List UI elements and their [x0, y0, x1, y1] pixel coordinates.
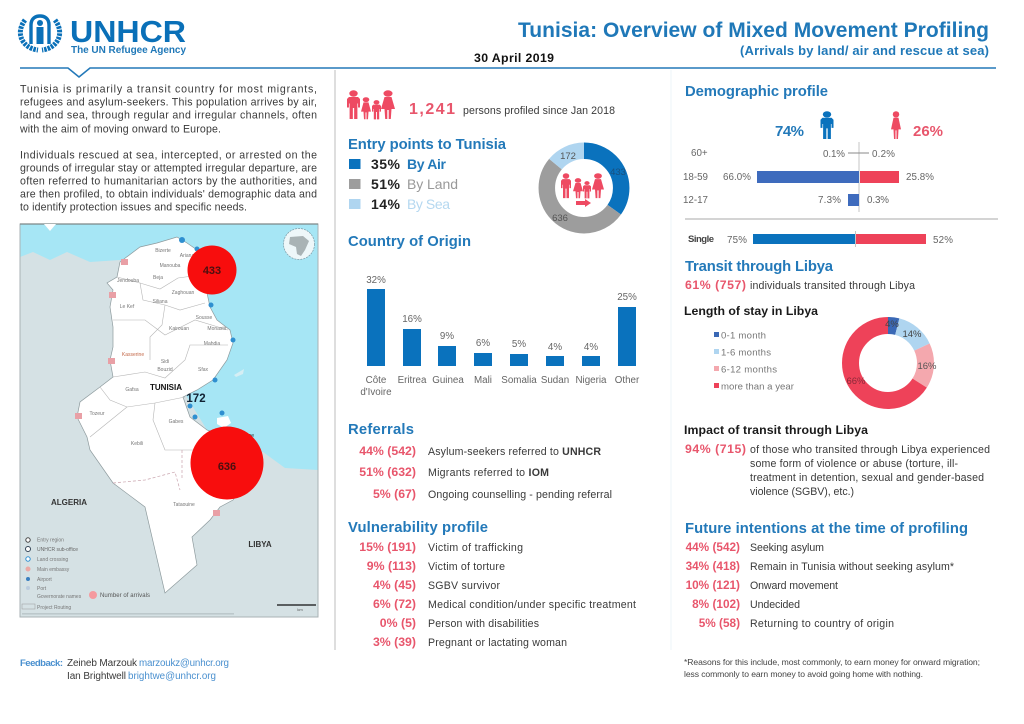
legend: Port: [37, 586, 47, 592]
donut chart: entry points: 636: [552, 213, 568, 224]
future intention rows: 10% (121): [686, 578, 740, 592]
bar chart: country of origin: 4%: [548, 342, 562, 353]
legend: entry points: 14%: [371, 196, 401, 212]
legend: Entry region: [37, 538, 64, 544]
text block: introduction: Individuals rescued at sea, intercepted, or arrested on the: [20, 150, 317, 162]
legend: entry points: By Sea: [407, 196, 450, 212]
bar chart: country of origin: Nigeria: [575, 375, 607, 386]
donut chart: length of stay: 66%: [846, 376, 866, 387]
legend: length of stay: 0-1 month: [721, 330, 766, 342]
map: Tunisia arrivals: LIBYA: [248, 540, 272, 549]
donut chart: length of stay: 4%: [885, 319, 899, 330]
vulnerability rows: Victim of trafficking: [428, 542, 523, 554]
impact description: violence (SGBV), etc.): [750, 486, 854, 498]
bar chart: country of origin: [360, 275, 640, 398]
population pyramid: [683, 142, 934, 212]
vulnerability rows: Medical condition/under specific treatment: [428, 599, 636, 611]
bar chart: country of origin: 25%: [617, 292, 637, 303]
vulnerability rows: 6% (72): [373, 597, 416, 611]
feedback contacts: marzoukz@unhcr.org: [139, 658, 229, 669]
icon: family: [347, 90, 395, 119]
place labels: Tataouine: [173, 502, 195, 508]
place labels: Sidi: [161, 359, 169, 365]
wordmark: UNHCR: [70, 14, 186, 49]
future intention rows: [686, 540, 954, 630]
bar chart: country of origin: Guinea: [432, 375, 464, 386]
text block: introduction: with the aim of moving onward to Europe.: [19, 124, 221, 136]
legend: length of stay: [714, 330, 795, 392]
future intention rows: 8% (102): [692, 597, 740, 611]
label: Tunisia: TUNISIA: [150, 383, 182, 392]
governorate borders: [90, 275, 228, 450]
text block: introduction: grounds of irregular stay or attempted irregular departure, are: [20, 162, 317, 174]
heading: impact: Impact of transit through Libya: [684, 423, 868, 437]
place labels: Gafsa: [125, 387, 139, 393]
legend: [22, 538, 150, 611]
referral rows: Asylum-seekers referred to UNHCR: [428, 446, 601, 458]
bubble: 636 arrivals: [190, 426, 264, 500]
footnote: less commonly to earn money to avoid going home with nothing.: [684, 669, 923, 679]
legend: Land crossing: [37, 557, 68, 563]
feedback contacts: Zeineb Marzouk: [67, 658, 138, 669]
impact description: of those who transited through Libya experienced: [750, 444, 990, 456]
donut chart: length of stay: 16%: [917, 361, 937, 372]
legend: length of stay: more than a year: [721, 382, 795, 392]
future intention rows: Seeking asylum: [750, 542, 824, 554]
vulnerability rows: 3% (39): [373, 635, 416, 649]
bar chart: country of origin: Eritrea: [398, 375, 427, 386]
footnote: *Reasons for this include, most commonly, to earn money for onward migration;: [684, 657, 980, 667]
population pyramid: 7.3%: [818, 195, 841, 206]
vulnerability rows: SGBV survivor: [428, 580, 500, 592]
bar chart: country of origin: 32%: [366, 275, 386, 286]
heading: vulnerability: Vulnerability profile: [348, 520, 488, 536]
text block: introduction: often referred to humanitarian actors by the authorities, and: [20, 176, 317, 188]
donut chart: length of stay: [846, 319, 937, 400]
text block: introduction: are then profiled, to obtain individuals' demographic data and: [20, 188, 317, 200]
footnote: [684, 657, 980, 679]
vulnerability rows: Pregnant or lactating woman: [428, 637, 567, 649]
subtitle: (Arrivals by land/ air and rescue at sea): [740, 43, 989, 58]
panel: future intentions: [685, 521, 968, 630]
place labels: Siliana: [152, 299, 168, 305]
donut chart: entry points: [547, 151, 626, 225]
legend: entry points: 51%: [371, 176, 401, 192]
place labels: Le Kef: [120, 304, 135, 310]
bubble: 433 arrivals: [188, 246, 236, 294]
bar chart: country of origin: Other: [615, 375, 640, 386]
text block: introduction: land and sea, through regular and irregular channels, often: [20, 110, 317, 122]
bubble: 433 arrivals: 433: [203, 265, 221, 277]
date: 30 April 2019: [474, 51, 554, 65]
impact description: some form of violence or abuse (torture, ill-: [750, 458, 958, 470]
anchor markers: [179, 237, 236, 420]
scale bar: [277, 605, 316, 612]
future intention rows: 34% (418): [686, 559, 740, 573]
transit statistic: [685, 278, 915, 292]
text block: introduction: Tunisia is primarily a transit country for most migrants,: [20, 84, 317, 96]
panel: impact of transit: [684, 423, 990, 498]
place labels: Bizerte: [155, 248, 171, 254]
feedback contacts: brightwe@unhcr.org: [128, 671, 216, 682]
bar chart: country of origin: Somalia: [501, 375, 537, 386]
text block: introduction: [19, 84, 317, 214]
header rule with notch: [20, 68, 996, 77]
population pyramid: 0.2%: [872, 149, 895, 160]
bar chart: country of origin: d'Ivoire: [360, 387, 392, 398]
heading: length of stay: Length of stay in Libya: [684, 304, 818, 318]
population pyramid: 60+: [691, 148, 708, 159]
bubble: 636 arrivals: 636: [218, 461, 236, 473]
place labels: Beja: [153, 275, 163, 281]
neighbouring land: [20, 252, 318, 617]
place labels: Jendouba: [117, 278, 139, 284]
bar chart: country of origin: Côte: [366, 375, 387, 386]
referral rows: [359, 444, 612, 501]
vulnerability rows: [359, 540, 636, 649]
place labels: Monastir: [207, 326, 227, 332]
place labels: Bouzid: [157, 367, 173, 373]
icon: laurel wreath and sheltering hands: [20, 16, 60, 50]
bar chart: country of origin: 4%: [584, 342, 598, 353]
legend: entry points: By Air: [407, 156, 447, 172]
referral rows: 5% (67): [373, 487, 416, 501]
title block: [474, 19, 989, 65]
vulnerability rows: Victim of torture: [428, 561, 505, 573]
referral rows: Ongoing counselling - pending referral: [428, 489, 612, 501]
legend: Main embassy: [37, 567, 70, 573]
impact description: [750, 444, 990, 498]
female share: 26%: [913, 123, 943, 140]
total profiled: 1,241: [409, 101, 455, 118]
total profiled: [409, 101, 615, 118]
bar chart: country of origin: 5%: [512, 339, 526, 350]
legend: Airport: [37, 577, 52, 583]
single status bar: Single: [688, 234, 714, 245]
bar chart: country of origin: 9%: [440, 331, 454, 342]
place labels: Manouba: [160, 263, 181, 269]
heading: entry points: Entry points to Tunisia: [348, 137, 507, 153]
single status bar: [688, 231, 953, 247]
title: Tunisia: Overview of Mixed Movement Profiling: [518, 19, 989, 42]
place labels: Sfax: [198, 367, 208, 373]
donut chart: entry points: 433: [610, 167, 626, 178]
bar chart: country of origin: Sudan: [541, 375, 569, 386]
female share: [891, 111, 943, 140]
future intention rows: 5% (58): [699, 616, 740, 630]
legend: UNHCR sub-office: [37, 547, 78, 553]
place labels: Ariana: [180, 253, 194, 259]
place labels: Mahdia: [204, 341, 220, 347]
population pyramid: 0.3%: [867, 195, 889, 206]
feedback contacts: Feedback:: [20, 658, 63, 669]
single status bar: 75%: [727, 235, 747, 246]
feedback contacts: [20, 658, 229, 682]
total profiled: persons profiled since Jan 2018: [463, 105, 615, 117]
scale bar: km: [297, 607, 303, 612]
panel: vulnerability profile: [348, 520, 636, 649]
future intention rows: Returning to country of origin: [750, 618, 894, 630]
referral rows: Migrants referred to IOM: [428, 467, 549, 479]
panel: demographic profile: [683, 84, 998, 247]
disclaimer: [22, 613, 234, 615]
population pyramid: 66.0%: [723, 172, 751, 183]
panel: transit through Libya: [685, 259, 915, 292]
tagline: The UN Refugee Agency: [71, 45, 186, 56]
impact statistic: 94% (715): [685, 442, 746, 456]
bar chart: country of origin: 16%: [402, 314, 422, 325]
impact description: treatment in detention, sexual and gender-based: [750, 472, 984, 484]
donut chart: entry points: 172: [560, 151, 576, 162]
place labels: Kasserine: [122, 352, 144, 358]
transit statistic: individuals transited through Libya: [750, 280, 915, 292]
place labels: Zaghouan: [172, 290, 194, 296]
feedback contacts: Ian Brightwell: [67, 671, 126, 682]
future intention rows: Undecided: [750, 599, 800, 611]
bar chart: country of origin: 6%: [476, 338, 490, 349]
heading: future intentions: Future intentions at the time of profiling: [685, 521, 968, 537]
male share: [775, 111, 834, 140]
heading: referrals: Referrals: [348, 422, 414, 438]
islands: [217, 416, 231, 428]
panel: referrals: [348, 422, 612, 501]
referral rows: 44% (542): [359, 444, 416, 458]
logo: UNHCR: [20, 14, 186, 56]
population pyramid: 18-59: [683, 172, 708, 183]
population pyramid: 25.8%: [906, 172, 934, 183]
legend: Governorate names: [37, 594, 82, 600]
population pyramid: 0.1%: [823, 149, 845, 160]
text block: introduction: to identify protection issues and specific needs.: [20, 202, 247, 214]
legend: entry points: [349, 156, 458, 212]
place labels: Kairouan: [169, 326, 189, 332]
country labels: ALGERIA: [51, 498, 87, 507]
marker: sea arrivals 172: 172: [186, 393, 206, 405]
border crossing markers: [75, 259, 220, 516]
place labels: Sousse: [196, 315, 213, 321]
inset: Africa locator: [284, 228, 314, 260]
future intention rows: Onward movement: [750, 580, 838, 592]
donut chart: length of stay: 14%: [902, 329, 922, 340]
legend: length of stay: 1-6 months: [721, 348, 771, 358]
icon: family with arrow: [561, 173, 604, 207]
place labels: Medenine: [232, 433, 254, 439]
heading: demographic: Demographic profile: [685, 84, 828, 100]
male share: 74%: [775, 123, 804, 140]
text block: introduction: refugees and asylum-seekers. This population arrives by air,: [20, 96, 317, 108]
place labels: Kebili: [131, 441, 143, 447]
population pyramid: 12-17: [683, 195, 708, 206]
bar chart: country of origin: Mali: [474, 375, 492, 386]
legend: Project Routing: [37, 605, 71, 611]
legend: entry points: By Land: [407, 176, 458, 192]
referral rows: 51% (632): [359, 465, 416, 479]
future intention rows: 44% (542): [686, 540, 740, 554]
legend: length of stay: 6-12 months: [721, 364, 777, 376]
place labels: Gabes: [169, 419, 184, 425]
heading: country of origin: Country of Origin: [348, 234, 471, 250]
heading: transit: Transit through Libya: [685, 259, 834, 275]
Tunisia territory: [77, 237, 250, 593]
place labels: Tozeur: [89, 411, 105, 417]
vulnerability rows: 4% (45): [373, 578, 416, 592]
transit statistic: 61% (757): [685, 278, 746, 292]
legend: Number of arrivals: [100, 593, 150, 599]
map: Tunisia arrivals: [20, 224, 318, 617]
future intention rows: Remain in Tunisia without seeking asylum*: [750, 561, 954, 573]
vulnerability rows: Person with disabilities: [428, 618, 539, 630]
vulnerability rows: 0% (5): [380, 616, 416, 630]
vulnerability rows: 9% (113): [367, 559, 416, 573]
single status bar: 52%: [933, 235, 953, 246]
vulnerability rows: 15% (191): [359, 540, 416, 554]
legend: entry points: 35%: [371, 156, 401, 172]
place labels: [89, 248, 254, 508]
